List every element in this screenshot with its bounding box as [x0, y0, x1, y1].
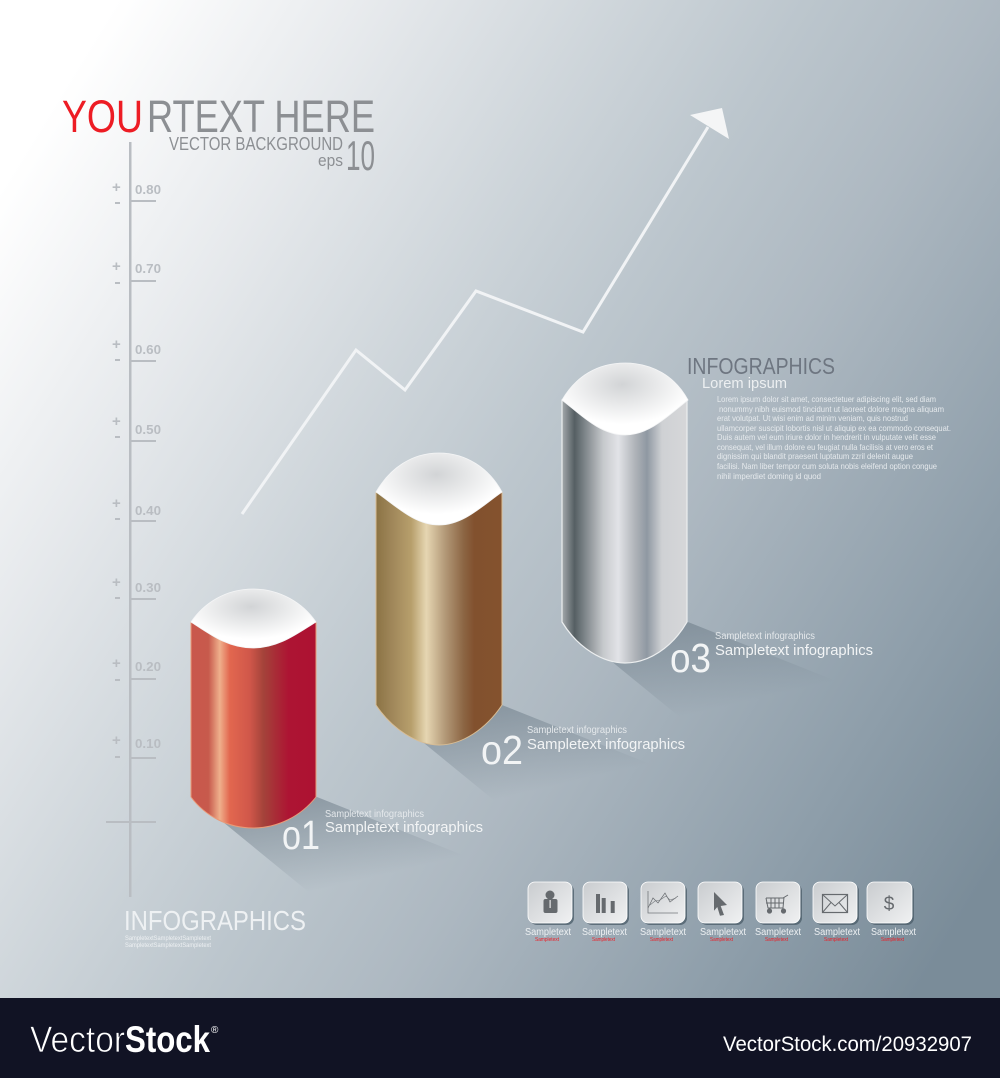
- icon: bar chart: [582, 882, 629, 943]
- scale 0.40: +: [112, 495, 121, 512]
- title: eps: [318, 151, 343, 170]
- label 02: [481, 725, 685, 773]
- label 02: Sampletext infographics: [527, 725, 627, 736]
- scale 0.50: [112, 413, 161, 442]
- icon: dollar: [867, 882, 916, 943]
- bar 2: gold cylinder: [376, 453, 502, 745]
- scale 0.10: 0.10: [135, 736, 161, 751]
- label 01: Sampletext infographics: [325, 819, 483, 836]
- label 01: o1: [282, 812, 320, 858]
- footer logo: ®: [211, 1025, 219, 1036]
- icon: cursor: [698, 882, 746, 943]
- icon: bar chart: Sampletext: [592, 937, 615, 943]
- bottom left heading: SampletextSampletextSampletext: [125, 943, 211, 949]
- bar 3: silver cylinder: [562, 363, 688, 663]
- paragraph: Duis autem vel eum iriure dolor in hendrerit in vulputate velit esse: [717, 433, 936, 442]
- title: YOU: [62, 91, 143, 142]
- scale 0.70: +: [112, 258, 121, 275]
- label 03: [670, 631, 873, 681]
- paragraph: erat volutpat. Ut wisi enim ad minim veniam, quis nostrud: [717, 414, 908, 423]
- paragraph: nihil imperdiet doming id quod: [717, 472, 821, 481]
- title: VECTOR BACKGROUND: [169, 134, 343, 154]
- shadow: bar 3: [594, 622, 846, 723]
- vertical scale axis: [106, 142, 161, 897]
- rising arrow: [242, 108, 729, 514]
- footer logo: Stock: [125, 1019, 210, 1060]
- shadow: bar 2: [408, 705, 660, 806]
- paragraph: Lorem ipsum dolor sit amet, consectetuer adipiscing elit, sed diam: [717, 395, 936, 404]
- scale 0.60: +: [112, 336, 121, 353]
- scale 0.70: [112, 258, 161, 284]
- scale 0.20: [112, 655, 161, 681]
- icon: dollar: $: [884, 894, 895, 915]
- scale 0.10: +: [112, 732, 121, 749]
- paragraph: facilisi. Nam liber tempor cum soluta nobis eleifend option congue: [717, 462, 937, 471]
- scale 0.60: 0.60: [135, 342, 161, 357]
- bottom left heading: INFOGRAPHICS: [124, 905, 306, 936]
- icon: cursor: Sampletext: [700, 927, 746, 938]
- label 02: Sampletext infographics: [527, 736, 685, 753]
- icon: dollar: Sampletext: [871, 927, 916, 938]
- paragraph: [717, 395, 951, 481]
- scale 0.20: +: [112, 655, 121, 672]
- icon: cursor: Sampletext: [710, 937, 733, 943]
- icon: shopping cart: Sampletext: [765, 937, 788, 943]
- icon: line chart: Sampletext: [650, 937, 673, 943]
- scale 0.80: [112, 179, 161, 204]
- heading: INFOGRAPHICS: [687, 353, 835, 379]
- footer bar: [0, 998, 1000, 1078]
- icon: envelope: Sampletext: [814, 927, 860, 938]
- label 03: o3: [670, 635, 711, 681]
- scale 0.60: [112, 336, 161, 362]
- title: [62, 91, 375, 179]
- paragraph: nonummy nibh euismod tincidunt ut laoreet dolore magna aliquam: [719, 405, 944, 414]
- scale 0.30: [112, 574, 161, 600]
- icon: envelope: [813, 882, 860, 943]
- title: 10: [346, 132, 375, 179]
- scale 0.80: 0.80: [135, 182, 161, 197]
- scale 0.40: [112, 495, 161, 522]
- scale 0.70: 0.70: [135, 261, 161, 276]
- paragraph: consequat, vel illum dolore eu feugiat nulla facilisis at vero eros et: [717, 443, 934, 452]
- paragraph: ullamcorper suscipit lobortis nisl ut aliquip ex ea commodo consequat.: [717, 424, 951, 433]
- scale 0.50: +: [112, 413, 121, 430]
- scale 0.20: 0.20: [135, 659, 161, 674]
- icon: line chart: [640, 882, 687, 943]
- label 01: [282, 809, 483, 858]
- icon: person: Sampletext: [525, 927, 571, 938]
- footer logo: [30, 1019, 219, 1060]
- bottom left heading: [124, 905, 306, 949]
- scale 0.10: [112, 732, 161, 759]
- footer url: VectorStock.com/20932907: [723, 1033, 972, 1056]
- label 03: Sampletext infographics: [715, 642, 873, 659]
- icon: person: [525, 882, 574, 943]
- icon: shopping cart: Sampletext: [755, 927, 801, 938]
- icon: line chart: Sampletext: [640, 927, 686, 938]
- label 03: Sampletext infographics: [715, 631, 815, 642]
- icon: bar chart: Sampletext: [582, 927, 627, 938]
- icon: dollar: Sampletext: [881, 937, 904, 943]
- label 01: Sampletext infographics: [325, 809, 424, 820]
- icon: person: Sampletext: [535, 937, 559, 943]
- scale 0.50: 0.50: [135, 422, 161, 437]
- title: RTEXT HERE: [147, 91, 375, 142]
- scale 0.80: +: [112, 179, 121, 196]
- bottom left heading: SampletextSampletextSampletext: [125, 936, 211, 942]
- icon: shopping cart: [755, 882, 802, 943]
- icon: envelope: Sampletext: [824, 937, 848, 943]
- label 02: o2: [481, 727, 523, 773]
- subheading: Lorem ipsum: [702, 375, 787, 392]
- scale 0.30: 0.30: [135, 580, 161, 595]
- scale 0.30: +: [112, 574, 121, 591]
- paragraph: dignissim qui blandit praesent luptatum zzril delenit augue: [717, 452, 913, 461]
- bar 1: red cylinder: [191, 589, 316, 828]
- scale 0.40: 0.40: [135, 503, 161, 518]
- text block: infographics description: [687, 353, 951, 481]
- footer logo: Vector: [30, 1019, 125, 1060]
- shadow: bar 1: [223, 797, 475, 898]
